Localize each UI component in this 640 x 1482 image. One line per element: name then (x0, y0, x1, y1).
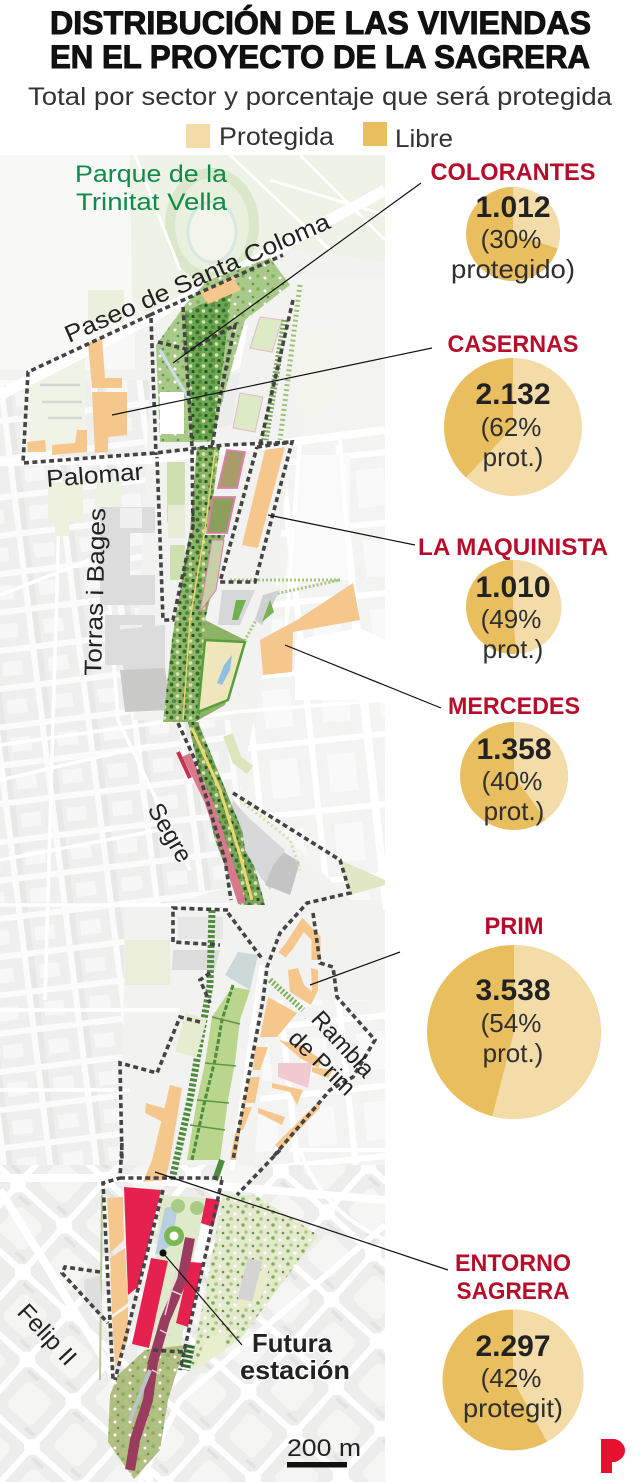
panel: Prim (427, 913, 601, 1119)
pie: Mercedes 40% protected (460, 722, 568, 830)
panel: La Maquinista (418, 534, 608, 664)
map: streets and parks (0, 155, 385, 1482)
map label: Segre: Segre (142, 798, 197, 867)
map label: Paseo de Santa Coloma: Paseo de Santa Coloma (61, 208, 335, 348)
map label: Futura estación: estación (240, 1355, 350, 1385)
panel: La Maquinista: prot.) (483, 634, 543, 664)
panel: Casernas: prot.) (483, 442, 543, 472)
map base: city blocks (0, 155, 385, 1482)
map label: park (75, 161, 228, 216)
map label: Felip II: Felip II (12, 1299, 82, 1371)
pie: Prim 54% protected (427, 945, 601, 1119)
pie: La Maquinista 49% protected (466, 560, 562, 654)
title: DISTRIBUCIÓN DE LAS VIVIENDAS (50, 5, 591, 41)
panel: Mercedes (448, 693, 580, 830)
map: protected station plots in red (124, 1187, 220, 1348)
map label: Futura estación (240, 1328, 350, 1385)
panel: Entorno Sagrera: (42% (481, 1363, 541, 1393)
map: dashed sector boundaries (23, 255, 375, 1380)
map label: Futura estación: Futura (252, 1328, 333, 1358)
panel: Entorno Sagrera: SAGRERA (456, 1278, 570, 1305)
panel: Prim: (54% (481, 1008, 541, 1038)
panel: Mercedes: 1.358 (476, 733, 552, 766)
legend (186, 122, 453, 153)
map label: Rambla de Prim: de Prim (283, 1025, 361, 1101)
panel: La Maquinista: LA MAQUINISTA (418, 534, 608, 561)
grey building blocks (100, 325, 300, 985)
panel: Entorno Sagrera: ENTORNO (455, 1250, 571, 1277)
panel: Casernas (444, 331, 582, 496)
leader lines (112, 183, 448, 1270)
map of La Sagrera (0, 155, 385, 1482)
map label: park: Parque de la (75, 161, 228, 188)
map label: park: Trinitat Vella (76, 189, 228, 216)
panel: La Maquinista: (49% (481, 604, 541, 634)
panel: Mercedes: MERCEDES (448, 693, 580, 720)
panel: Prim: prot.) (483, 1038, 543, 1068)
logo (601, 1439, 625, 1473)
map label: Rambla de Prim (283, 1006, 380, 1101)
panel: Colorantes: COLORANTES (430, 159, 596, 186)
panel: Colorantes: (30% (481, 224, 541, 254)
scale bar: 200 m (287, 1435, 361, 1462)
title: EN EL PROYECTO DE LA SAGRERA (50, 39, 590, 75)
map: free housing plots in orange (27, 277, 360, 1367)
panel: Casernas: (62% (481, 412, 541, 442)
map label: Rambla de Prim: Rambla (306, 1006, 380, 1083)
pie: Colorantes 30% protected (466, 187, 560, 281)
title (50, 5, 591, 75)
panel: Colorantes: protegido) (451, 254, 575, 284)
panel: Mercedes: (40% (482, 766, 542, 796)
panel: Mercedes: prot.) (484, 796, 544, 826)
panel: Colorantes (430, 159, 596, 284)
panel: Entorno Sagrera (442, 1250, 584, 1450)
panel: Entorno Sagrera: protegit) (463, 1393, 563, 1423)
pie: Entorno Sagrera 42% protected (442, 1310, 584, 1450)
station marker and leader (159, 1249, 242, 1345)
map label: Palomar: Palomar (45, 458, 144, 493)
map label: Torras i Bages: Torras i Bages (80, 508, 111, 676)
legend: Libre (395, 125, 453, 153)
pie: Casernas 62% protected (444, 358, 582, 496)
panel: La Maquinista: 1.010 (475, 571, 551, 604)
panel: Colorantes: 1.012 (475, 191, 551, 224)
panel: Casernas: 2.132 (475, 378, 551, 411)
subtitle: Total por sector y porcentaje que será protegida (28, 83, 612, 111)
panel: Prim: PRIM (484, 913, 544, 940)
legend: Protegida (219, 123, 334, 151)
panel: Casernas: CASERNAS (448, 331, 578, 358)
panel: Prim: 3.538 (475, 974, 551, 1007)
map: green corridor (84, 258, 385, 1479)
panel: Entorno Sagrera: 2.297 (475, 1330, 551, 1363)
